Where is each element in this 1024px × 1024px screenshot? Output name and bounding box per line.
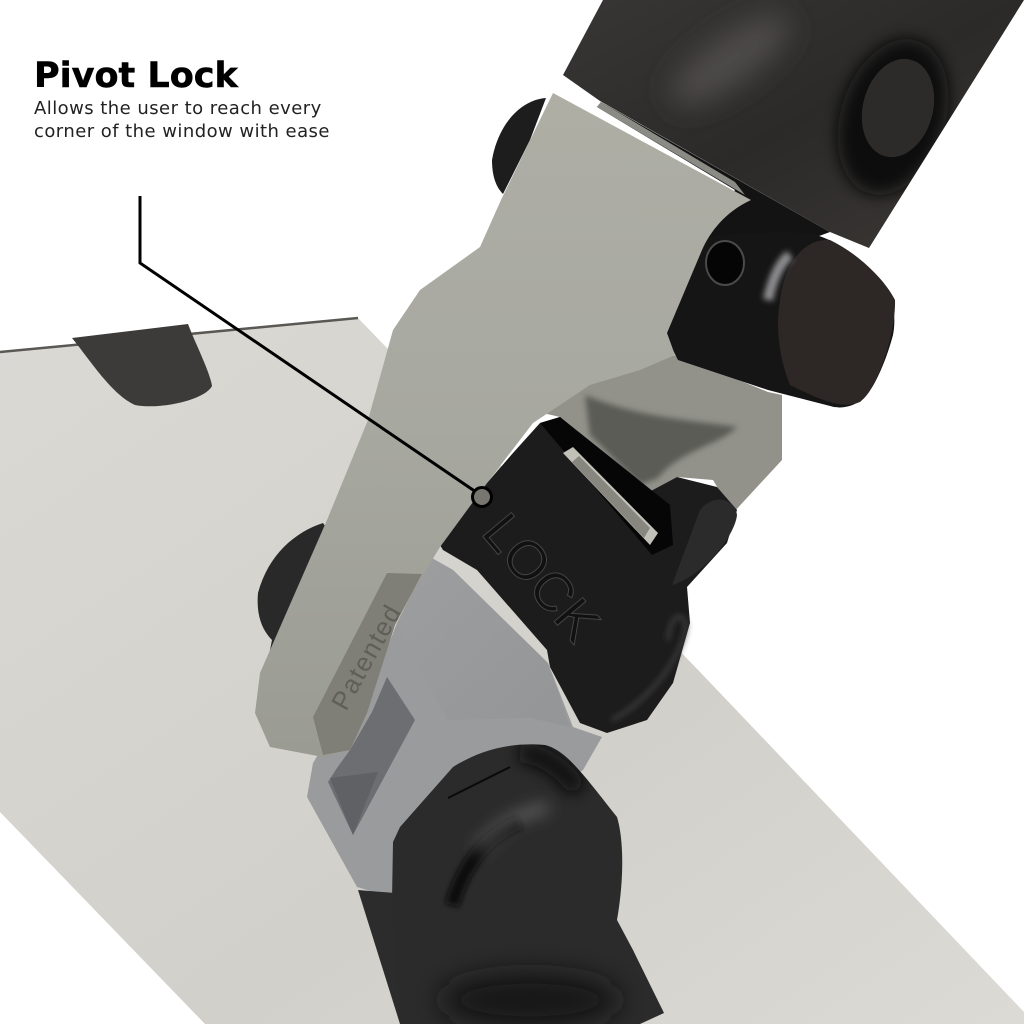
- rear black ring: [258, 523, 335, 690]
- embossed patented label: Patented: [325, 599, 408, 715]
- grey mount body: [307, 557, 602, 1024]
- mount window: [328, 677, 415, 835]
- embossed lock label: LOCK: [471, 502, 611, 653]
- description text: [34, 98, 330, 142]
- back grey arm: [530, 355, 782, 513]
- left knob: [492, 98, 546, 194]
- title: Pivot Lock: [34, 56, 238, 96]
- grey lever: [255, 93, 751, 757]
- pole: [563, 0, 1024, 248]
- description text: Allows the user to reach every: [34, 98, 322, 119]
- lock tab: [440, 417, 737, 733]
- dark underside: [358, 890, 428, 1024]
- lever side strip: [313, 573, 422, 755]
- mount top face: [397, 557, 570, 727]
- black foot: [392, 744, 664, 1024]
- pole button: [851, 51, 945, 165]
- right knob: [664, 233, 895, 407]
- plate tab: [72, 324, 212, 406]
- pole recess: [831, 33, 956, 202]
- foot score mark: [448, 767, 510, 798]
- lock gloss: [612, 617, 686, 720]
- leader line: [140, 196, 492, 506]
- pole collar: [597, 102, 830, 248]
- plate: [0, 318, 1024, 1024]
- description text: corner of the window with ease: [34, 121, 330, 142]
- lock slot: [540, 417, 673, 555]
- lock hinge: [672, 500, 737, 585]
